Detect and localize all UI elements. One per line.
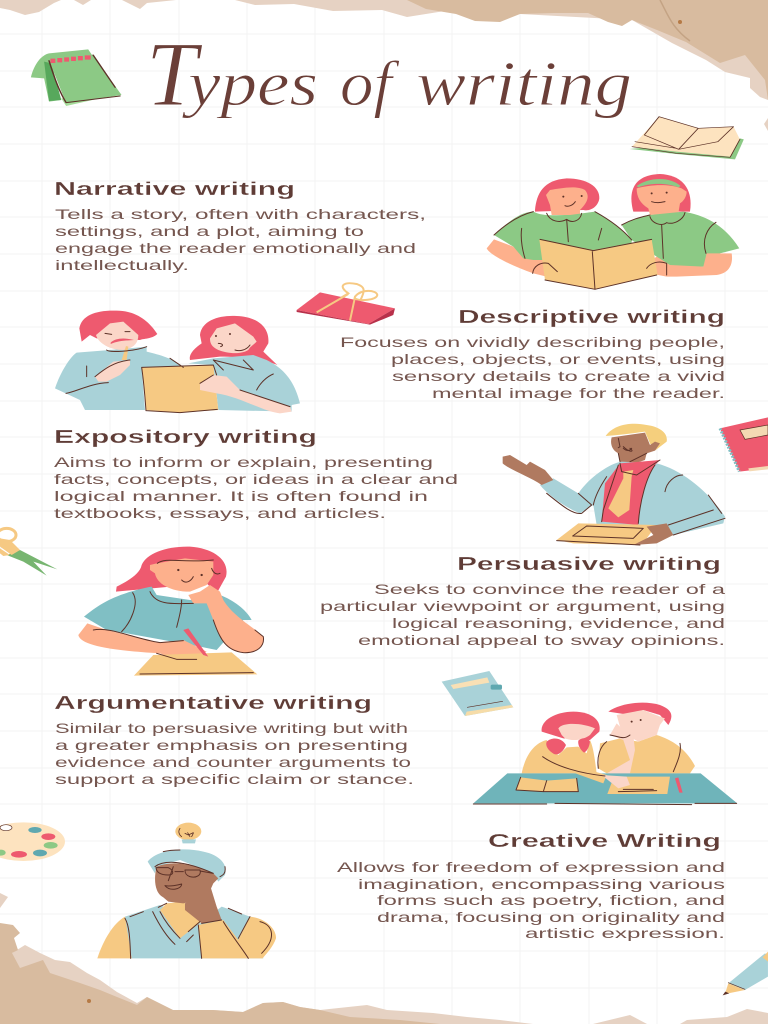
illustration: argumentative students at desk <box>473 703 737 805</box>
text: persuasive writing: logical reasoning, evidence, and <box>392 615 725 631</box>
illustration: descriptive writers <box>55 311 300 413</box>
text: argumentative writing: Similar to persuasive writing but with <box>55 720 408 736</box>
text: narrative writing: intellectually. <box>55 257 189 273</box>
heading: argumentative writing: Argumentative writing <box>54 693 372 713</box>
icon: green notepad <box>31 49 122 106</box>
heading: descriptive writing: Descriptive writing <box>458 307 725 327</box>
text: creative writing <box>337 859 725 941</box>
torn paper: top edge <box>0 0 768 131</box>
text: descriptive writing: Focuses on vividly describing people, <box>340 334 725 350</box>
text: descriptive writing: mental image for the reader. <box>432 385 725 401</box>
text: creative writing: imagination, encompassing various <box>358 876 725 892</box>
icon: binder clip <box>297 283 395 325</box>
text: descriptive writing <box>340 334 725 401</box>
text: persuasive writing: emotional appeal to sway opinions. <box>358 632 725 648</box>
icon: blue notebook <box>442 671 513 716</box>
text: persuasive writing: Seeks to convince the reader of a <box>374 581 725 597</box>
text: argumentative writing <box>55 720 414 787</box>
text: narrative writing: engage the reader emotionally and <box>55 240 416 256</box>
text: argumentative writing: a greater emphasis on presenting <box>55 737 408 753</box>
icon: scissors <box>0 528 57 576</box>
heading: persuasive writing: Persuasive writing <box>457 554 721 574</box>
title: T <box>146 23 203 125</box>
heading: creative writing: Creative Writing <box>488 831 721 851</box>
text: creative writing: Allows for freedom of expression and <box>337 859 725 875</box>
illustration: persuasive writer <box>78 547 264 676</box>
text: narrative writing <box>55 206 426 273</box>
icon: light bulb <box>175 823 201 843</box>
text: argumentative writing: support a specific claim or stance. <box>55 771 414 787</box>
icon: red spiral notebook <box>720 417 768 472</box>
illustration: narrative writers <box>487 174 739 289</box>
text: creative writing: artistic expression. <box>525 925 725 941</box>
title: of <box>340 48 401 119</box>
text: persuasive writing <box>320 581 725 648</box>
title: writing <box>416 48 632 119</box>
text: argumentative writing: evidence and counter arguments to <box>55 754 411 770</box>
text: expository writing <box>54 454 458 521</box>
text: creative writing: forms such as poetry, fiction, and <box>377 892 725 908</box>
text: descriptive writing: places, objects, or events, using <box>391 351 725 367</box>
text: narrative writing: settings, and a plot, aiming to <box>55 223 364 239</box>
text: expository writing: Aims to inform or explain, presenting <box>54 454 433 470</box>
illustration: expository presenter <box>503 424 725 545</box>
title <box>146 23 632 125</box>
text: narrative writing: Tells a story, often with characters, <box>55 206 426 222</box>
text: expository writing: logical manner. It is often found in <box>54 488 428 504</box>
text: creative writing: drama, focusing on originality and <box>377 909 725 925</box>
heading: narrative writing: Narrative writing <box>54 179 295 199</box>
icon: open book <box>630 117 744 159</box>
text: expository writing: facts, concepts, or ideas in a clear and <box>54 471 458 487</box>
heading: expository writing: Expository writing <box>54 427 317 447</box>
text: descriptive writing: sensory details to create a vivid <box>392 368 725 384</box>
icon: paint palette <box>0 822 65 861</box>
icon: pencil <box>723 952 768 995</box>
text: expository writing: textbooks, essays, and articles. <box>54 505 386 521</box>
title: ypes <box>181 48 318 119</box>
text: persuasive writing: particular viewpoint or argument, using <box>320 598 725 614</box>
torn paper: bottom edge <box>0 893 768 1024</box>
illustration: creative thinker <box>97 849 276 958</box>
